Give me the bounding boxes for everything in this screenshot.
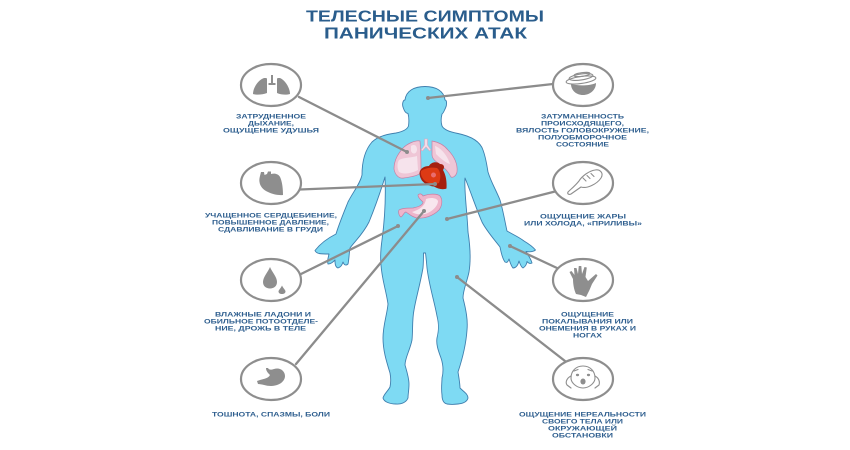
label: unreality: ОБСТАНОВКИ bbox=[552, 432, 614, 439]
label: unreality bbox=[519, 411, 647, 439]
label: difficult breathing: ОЩУЩЕНИЕ УДУШЬЯ bbox=[223, 127, 320, 134]
organ: lungs bbox=[394, 139, 457, 178]
label: unreality: ОЩУЩЕНИЕ НЕРЕАЛЬНОСТИ bbox=[519, 411, 647, 418]
label: sweaty palms: ОБИЛЬНОЕ ПОТООТДЕЛЕ- bbox=[204, 318, 318, 325]
label: tingling bbox=[539, 311, 637, 339]
title: ТЕЛЕСНЫЕ СИМПТОМЫ bbox=[306, 8, 544, 26]
icon: thermometer bbox=[553, 162, 613, 204]
label: clouded awareness: ЗАТУМАНЕННОСТЬ bbox=[541, 113, 625, 120]
organ: heart bbox=[420, 162, 447, 189]
icon: stomach bbox=[241, 358, 301, 400]
label: sweaty palms: ВЛАЖНЫЕ ЛАДОНИ И bbox=[215, 311, 312, 318]
icon: screaming face bbox=[553, 358, 613, 400]
human body silhouette bbox=[315, 86, 536, 404]
label: sweaty palms: НИЕ, ДРОЖЬ В ТЕЛЕ bbox=[215, 325, 306, 332]
title: ПАНИЧЕСКИХ АТАК bbox=[324, 26, 528, 42]
icon: dizzy head bbox=[553, 64, 613, 106]
label: heat or cold: ИЛИ ХОЛОДА, «ПРИЛИВЫ» bbox=[524, 220, 643, 227]
organ: stomach bbox=[399, 194, 442, 218]
label: clouded awareness: ПОЛУОБМОРОЧНОЕ bbox=[538, 134, 627, 141]
label: nausea: ТОШНОТА, СПАЗМЫ, БОЛИ bbox=[212, 411, 331, 418]
icon: sweat drops bbox=[241, 259, 301, 301]
label: tingling: НОГАХ bbox=[573, 332, 603, 339]
icon: hand bbox=[553, 259, 613, 301]
label: rapid heartbeat: СДАВЛИВАНИЕ В ГРУДИ bbox=[218, 226, 324, 233]
label: clouded awareness bbox=[516, 113, 649, 148]
label: heat or cold bbox=[524, 213, 643, 227]
label: tingling: ОНЕМЕНИЯ В РУКАХ И bbox=[539, 325, 637, 332]
label: sweaty palms bbox=[204, 311, 318, 332]
icon: lungs bbox=[241, 64, 301, 106]
label: clouded awareness: ПРОИСХОДЯЩЕГО, bbox=[541, 120, 624, 127]
label: unreality: ОКРУЖАЮЩЕЙ bbox=[548, 423, 618, 432]
label: clouded awareness: ВЯЛОСТЬ ГОЛОВОКРУЖЕНИЕ, bbox=[516, 127, 649, 134]
label: tingling: ПОКАЛЫВАНИЯ ИЛИ bbox=[542, 318, 634, 325]
label: difficult breathing bbox=[223, 113, 320, 134]
label: difficult breathing: ДЫХАНИЕ, bbox=[248, 120, 294, 127]
label: clouded awareness: СОСТОЯНИЕ bbox=[556, 141, 609, 148]
label: heat or cold: ОЩУЩЕНИЕ ЖАРЫ bbox=[540, 213, 626, 220]
label: rapid heartbeat: ПОВЫШЕННОЕ ДАВЛЕНИЕ, bbox=[212, 219, 329, 226]
title bbox=[306, 8, 544, 42]
label: rapid heartbeat bbox=[205, 212, 337, 233]
label: rapid heartbeat: УЧАЩЕННОЕ СЕРДЦЕБИЕНИЕ, bbox=[205, 212, 337, 219]
label: difficult breathing: ЗАТРУДНЕННОЕ bbox=[236, 113, 306, 120]
icon: heart bbox=[241, 162, 301, 204]
connector lines bbox=[296, 84, 565, 364]
label: unreality: СВОЕГО ТЕЛА ИЛИ bbox=[542, 418, 624, 425]
label: tingling: ОЩУЩЕНИЕ bbox=[561, 311, 614, 318]
